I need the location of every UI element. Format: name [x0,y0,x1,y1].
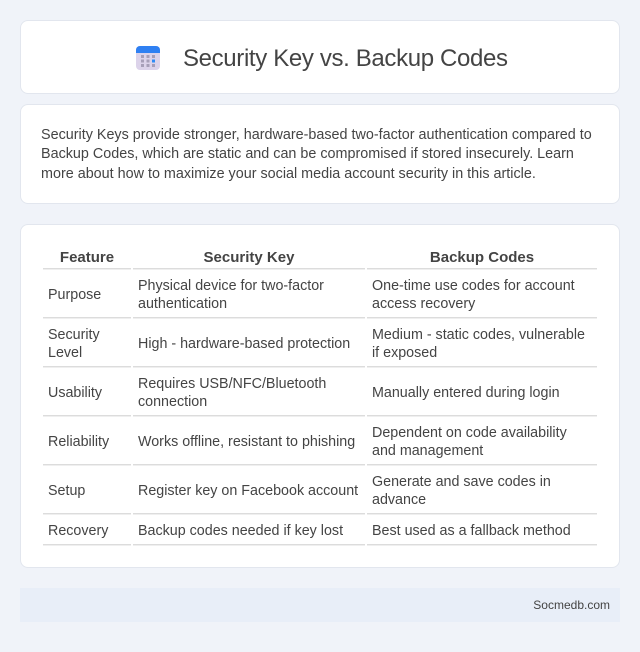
comparison table: if exposed [372,345,437,361]
comparison table: Feature [60,249,114,266]
comparison table: Dependent on code availability [372,425,567,441]
intro text [41,127,592,182]
intro text: Security Keys provide stronger, hardware-based two-factor authentication compared to [41,127,592,143]
comparison table: Recovery [48,523,108,539]
comparison table: Register key on Facebook account [138,483,358,499]
comparison table: Reliability [48,434,109,450]
comparison table: Best used as a fallback method [372,523,571,539]
comparison table: Usability [48,385,102,401]
intro text: Backup Codes, which are static and can be compromised if stored insecurely. Learn [41,146,574,162]
title card [20,20,620,94]
comparison table: High - hardware-based protection [138,336,350,352]
intro card [20,104,620,204]
comparison table: Physical device for two-factor [138,278,324,294]
icon: calendar keypad [136,46,160,70]
comparison table: Security [48,327,100,343]
comparison table: advance [372,492,426,508]
comparison table: Backup Codes [430,249,534,266]
footer text: Socmedb.com [533,598,610,612]
comparison table: One-time use codes for account [372,278,575,294]
comparison table: Level [48,345,82,361]
table card [20,224,620,568]
comparison table: Works offline, resistant to phishing [138,434,355,450]
intro text: more about how to maximize your social media account security in this article. [41,166,536,182]
comparison table: authentication [138,296,227,312]
comparison table: Requires USB/NFC/Bluetooth [138,376,326,392]
comparison table: Security Key [204,249,294,266]
title: Security Key vs. Backup Codes [183,45,508,72]
comparison table: Purpose [48,287,101,303]
comparison table: Manually entered during login [372,385,560,401]
comparison table: Generate and save codes in [372,474,551,490]
comparison table: and management [372,443,483,459]
comparison table: connection [138,394,207,410]
comparison table: Setup [48,483,85,499]
footer bar [20,588,620,622]
comparison table: Medium - static codes, vulnerable [372,327,585,343]
comparison table: Backup codes needed if key lost [138,523,343,539]
comparison table: access recovery [372,296,475,312]
